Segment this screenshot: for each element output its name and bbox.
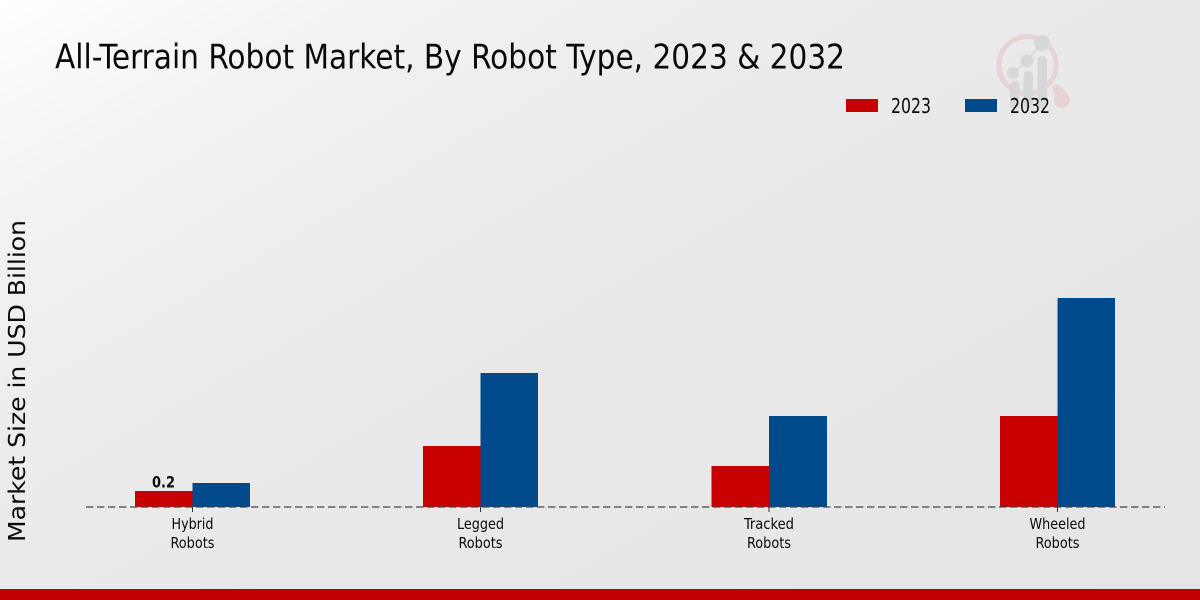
- bar chart: [86, 298, 1165, 552]
- category label: Wheeled Robots: Wheeled: [1030, 515, 1086, 533]
- data label: 0.2: [152, 472, 175, 492]
- legend: 2032: 2032: [1010, 94, 1050, 118]
- footer bar: [0, 589, 1200, 600]
- category label: Hybrid Robots: Hybrid: [172, 515, 214, 533]
- category label: Wheeled Robots: [1030, 515, 1086, 552]
- category label: Legged Robots: Legged: [457, 515, 504, 533]
- category label: Tracked Robots: Tracked: [743, 515, 794, 533]
- legend: 2023: [846, 94, 931, 118]
- legend: [846, 94, 1050, 118]
- y axis label: Market Size in USD Billion: [5, 220, 31, 542]
- category label: Hybrid Robots: [170, 515, 214, 552]
- legend: 2023: 2023: [891, 94, 931, 118]
- bars: Legged Robots: [423, 373, 538, 507]
- bars: Hybrid Robots: [135, 483, 250, 507]
- bars: Wheeled Robots: [1000, 298, 1115, 507]
- legend: 2032: [965, 94, 1050, 118]
- category label: Hybrid Robots: Robots: [170, 534, 214, 552]
- category label: Legged Robots: Robots: [458, 534, 502, 552]
- category label: Tracked Robots: Robots: [747, 534, 791, 552]
- category label: Legged Robots: [457, 515, 504, 552]
- bars: Tracked Robots: [712, 416, 827, 507]
- category label: Wheeled Robots: Robots: [1036, 534, 1080, 552]
- axis baseline: [86, 506, 1165, 508]
- title: All-Terrain Robot Market, By Robot Type, 2023 & 2032: [55, 38, 845, 76]
- category label: Tracked Robots: [743, 515, 794, 552]
- tick marks: [192, 507, 1058, 512]
- icon: watermark logo: [999, 35, 1070, 109]
